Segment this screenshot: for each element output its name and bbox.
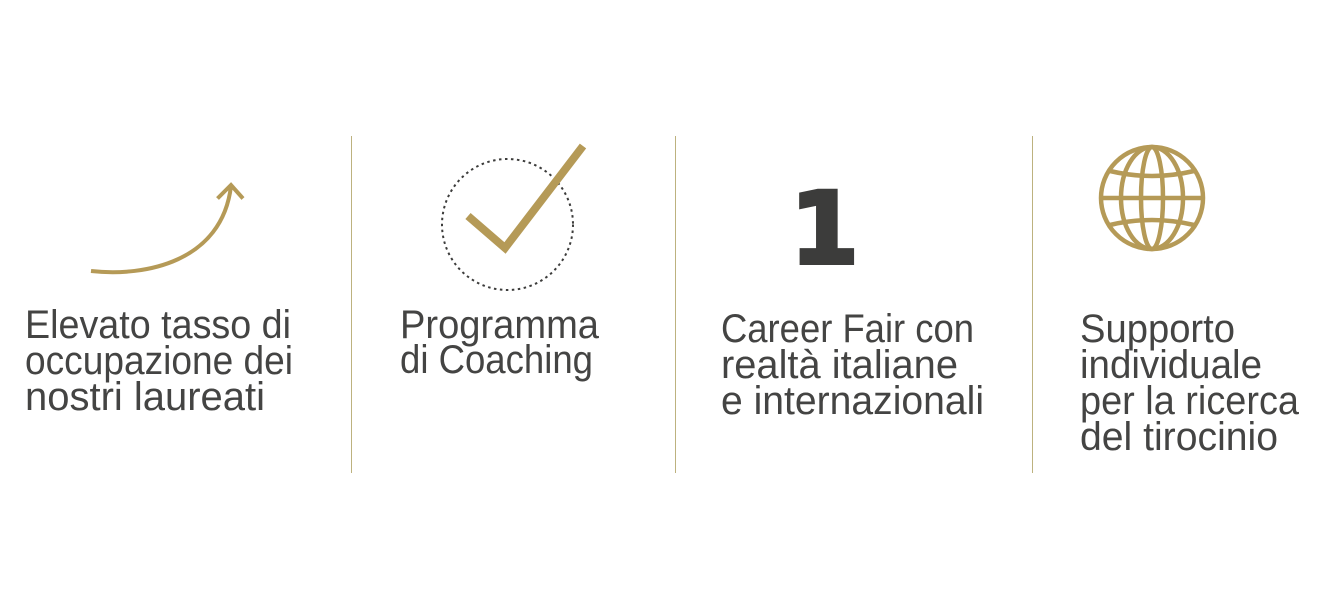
text: elevato tasso di occupazione: Elevato tasso di xyxy=(25,303,291,347)
text: supporto individuale xyxy=(1080,307,1300,459)
text: career fair xyxy=(721,307,984,423)
text: supporto individuale: per la ricerca xyxy=(1080,379,1300,423)
text: supporto individuale: del tirocinio xyxy=(1080,415,1278,459)
icon: globe xyxy=(1101,147,1203,249)
text: programma di coaching: di Coaching xyxy=(400,338,593,382)
panel: coaching xyxy=(400,146,600,382)
text: career fair: Career Fair con xyxy=(721,307,974,351)
text: elevato tasso di occupazione xyxy=(25,303,293,419)
panel: occupazione xyxy=(25,185,293,419)
icon: rising curved arrow xyxy=(91,185,243,272)
icon: dotted circle with check mark xyxy=(442,146,583,290)
icon: number one: 1 xyxy=(790,172,859,287)
text: programma di coaching xyxy=(400,303,600,382)
text: elevato tasso di occupazione: occupazione dei xyxy=(25,339,293,383)
text: supporto individuale: individuale xyxy=(1080,343,1262,387)
text: supporto individuale: Supporto xyxy=(1080,307,1235,351)
text: career fair: e internazionali xyxy=(721,379,984,423)
panel: supporto xyxy=(1080,147,1300,459)
text: elevato tasso di occupazione: nostri laureati xyxy=(25,375,265,419)
text: career fair: realtà italiane xyxy=(721,343,958,387)
panel: career fair xyxy=(721,172,984,423)
text: programma di coaching: Programma xyxy=(400,303,600,347)
